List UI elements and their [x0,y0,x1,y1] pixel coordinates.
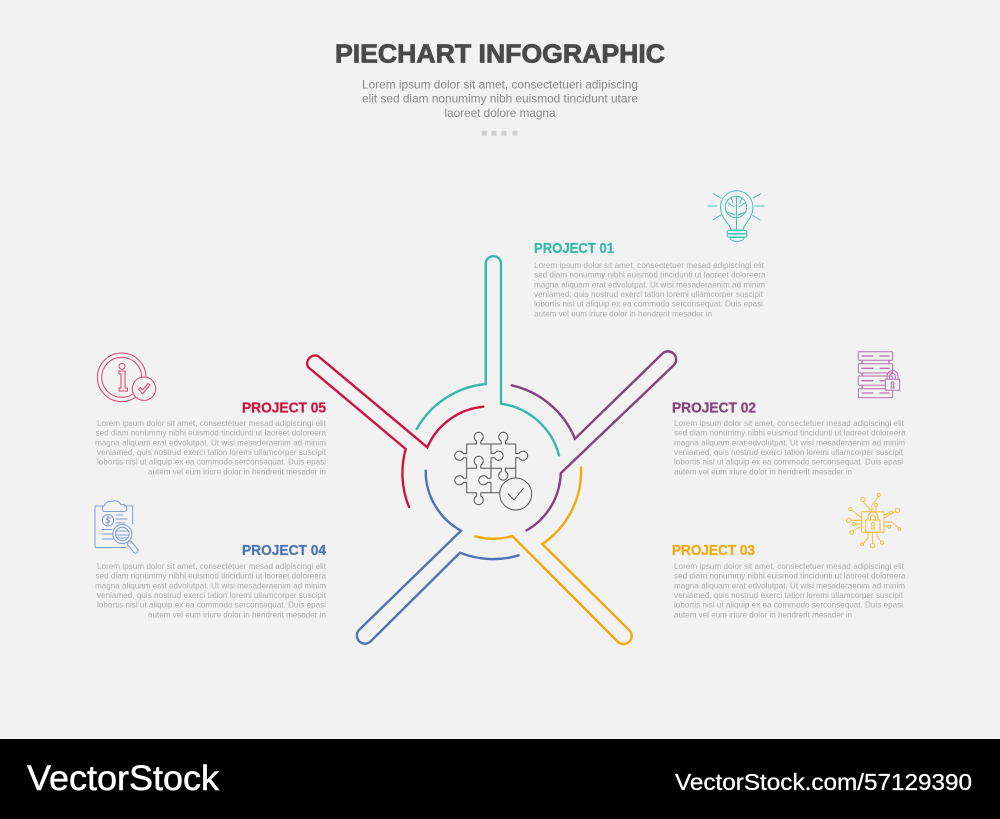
body text: project 04: Lorem ipsum dolor sit amet, consectetuer mesad adipiscingi elit [97,561,327,571]
body text: project 02: lobortis nisl ut aliquip ex ea commodo serconsequat. Duis epasi [674,457,903,467]
body text: project 02: sed diam nonummy nibhi euismod tincidunti ut laoreet doloreera [674,428,906,438]
body text: project 01: autem vel eum iriure dolor in hendrerit mesader in [534,308,712,318]
body text: project 05: magna aliquam erat edvolutpat. Ut wisi mesaderaenim ad minim [95,437,326,447]
body text: project 05: autem vel eum iriure dolor in hendrerit mesader in [148,466,326,476]
body text: project 02 [674,418,906,476]
heading: project 05: PROJECT 05 [242,400,326,416]
body text: project 01: Lorem ipsum dolor sit amet, consectetuer mesad adipiscingi elit [534,260,765,270]
pie arm: project 01 [417,256,559,455]
body text: project 01: veniamed, quis nostrud exerci tation loremi ullamcorper suscipit [534,289,764,299]
body text: project 04: lobortis nisl ut aliquip ex ea commodo serconsequat. Duis epasi [97,600,326,610]
body text: project 03: lobortis nisl ut aliquip ex ea commodo serconsequat. Duis epasi [674,600,903,610]
pie arm: project 05 [307,355,483,507]
footer url: VectorStock.com/57129390 [675,769,972,795]
body text: project 02: Lorem ipsum dolor sit amet, consectetuer mesad adipiscingi elit [674,418,905,428]
body text: project 05 [95,418,327,476]
body text: project 04: autem vel eum iriure dolor in hendrerit mesader in [148,609,326,619]
subtitle text: laoreet dolore magna [444,106,556,120]
heading: project 04: PROJECT 04 [242,543,326,559]
body text: project 02: autem vel eum iriure dolor in hendrerit mesader in [674,466,852,476]
icon: clipboard with magnifier [95,501,138,553]
icon: info with check badge [97,353,156,402]
panel: project 05 [95,353,327,476]
body text: project 04: magna aliquam erat edvolutpat. Ut wisi mesaderaenim ad minim [95,580,326,590]
body text: project 01 [534,260,766,318]
heading: project 03: PROJECT 03 [672,543,755,559]
body text: project 03: veniamed, quis nostrud exerci tation loremi ullamcorper suscipit [674,590,904,600]
body text: project 01: sed diam nonummy nibhi euismod tincidunti ut laoreet doloreera [534,270,766,280]
icon: circuit chip with lock [846,493,901,548]
body text: project 02: veniamed, quis nostrud exerci tation loremi ullamcorper suscipit [674,447,904,457]
body text: project 03: autem vel eum iriure dolor in hendrerit mesader in [674,609,852,619]
title: PIECHART INFOGRAPHIC [335,40,665,68]
body text: project 03 [674,561,906,619]
body text: project 01: lobortis nisl ut aliquip ex ea commodo serconsequat. Duis epasi [534,299,763,309]
footer logo: VectorStock [27,759,220,798]
icon: light bulb with brain [708,191,764,242]
subtitle text: Lorem ipsum dolor sit amet, consectetueri adipiscing [362,78,638,92]
panel: project 02 [672,352,906,476]
body text: project 04: veniamed, quis nostrud exerci tation loremi ullamcorper suscipit [97,590,327,600]
body text: project 05: veniamed, quis nostrud exerci tation loremi ullamcorper suscipit [97,447,327,457]
icon: puzzle with check [455,432,532,510]
subtitle text: elit sed diam nonumimy nibh euismod tincidunt utare [362,92,638,106]
icon: server with lock [858,352,900,398]
body text: project 02: magna aliquam erat edvolutpat. Ut wisi mesaderaenim ad minim [674,437,905,447]
panel: project 03 [672,493,906,619]
body text: project 03: sed diam nonummy nibhi euismod tincidunti ut laoreet doloreera [674,571,906,581]
body text: project 05: Lorem ipsum dolor sit amet, consectetuer mesad adipiscingi elit [97,418,327,428]
heading: project 02: PROJECT 02 [672,400,756,416]
body text: project 03: Lorem ipsum dolor sit amet, consectetuer mesad adipiscingi elit [674,561,905,571]
pie arm: project 02 [512,351,676,530]
body text: project 01: magna aliquam erat edvolutpat. Ut wisi mesaderaenim ad minim [534,279,765,289]
heading: project 01: PROJECT 01 [534,241,614,257]
pie arm: project 04 [357,471,519,644]
body text: project 04 [95,561,327,619]
panel: project 04 [95,501,327,619]
footer bar [0,739,1000,819]
subtitle text [362,78,638,120]
body text: project 04: sed diam nonummy nibhi euismod tincidunti ut laoreet doloreera [96,571,326,581]
pie arm: project 03 [475,467,632,644]
body text: project 03: magna aliquam erat edvolutpat. Ut wisi mesaderaenim ad minim [674,580,905,590]
title dots [482,131,518,136]
body text: project 05: sed diam nonummy nibhi euismod tincidunti ut laoreet doloreera [96,428,326,438]
body text: project 05: lobortis nisl ut aliquip ex ea commodo serconsequat. Duis epasi [97,457,326,467]
panel: project 01 [534,191,766,318]
